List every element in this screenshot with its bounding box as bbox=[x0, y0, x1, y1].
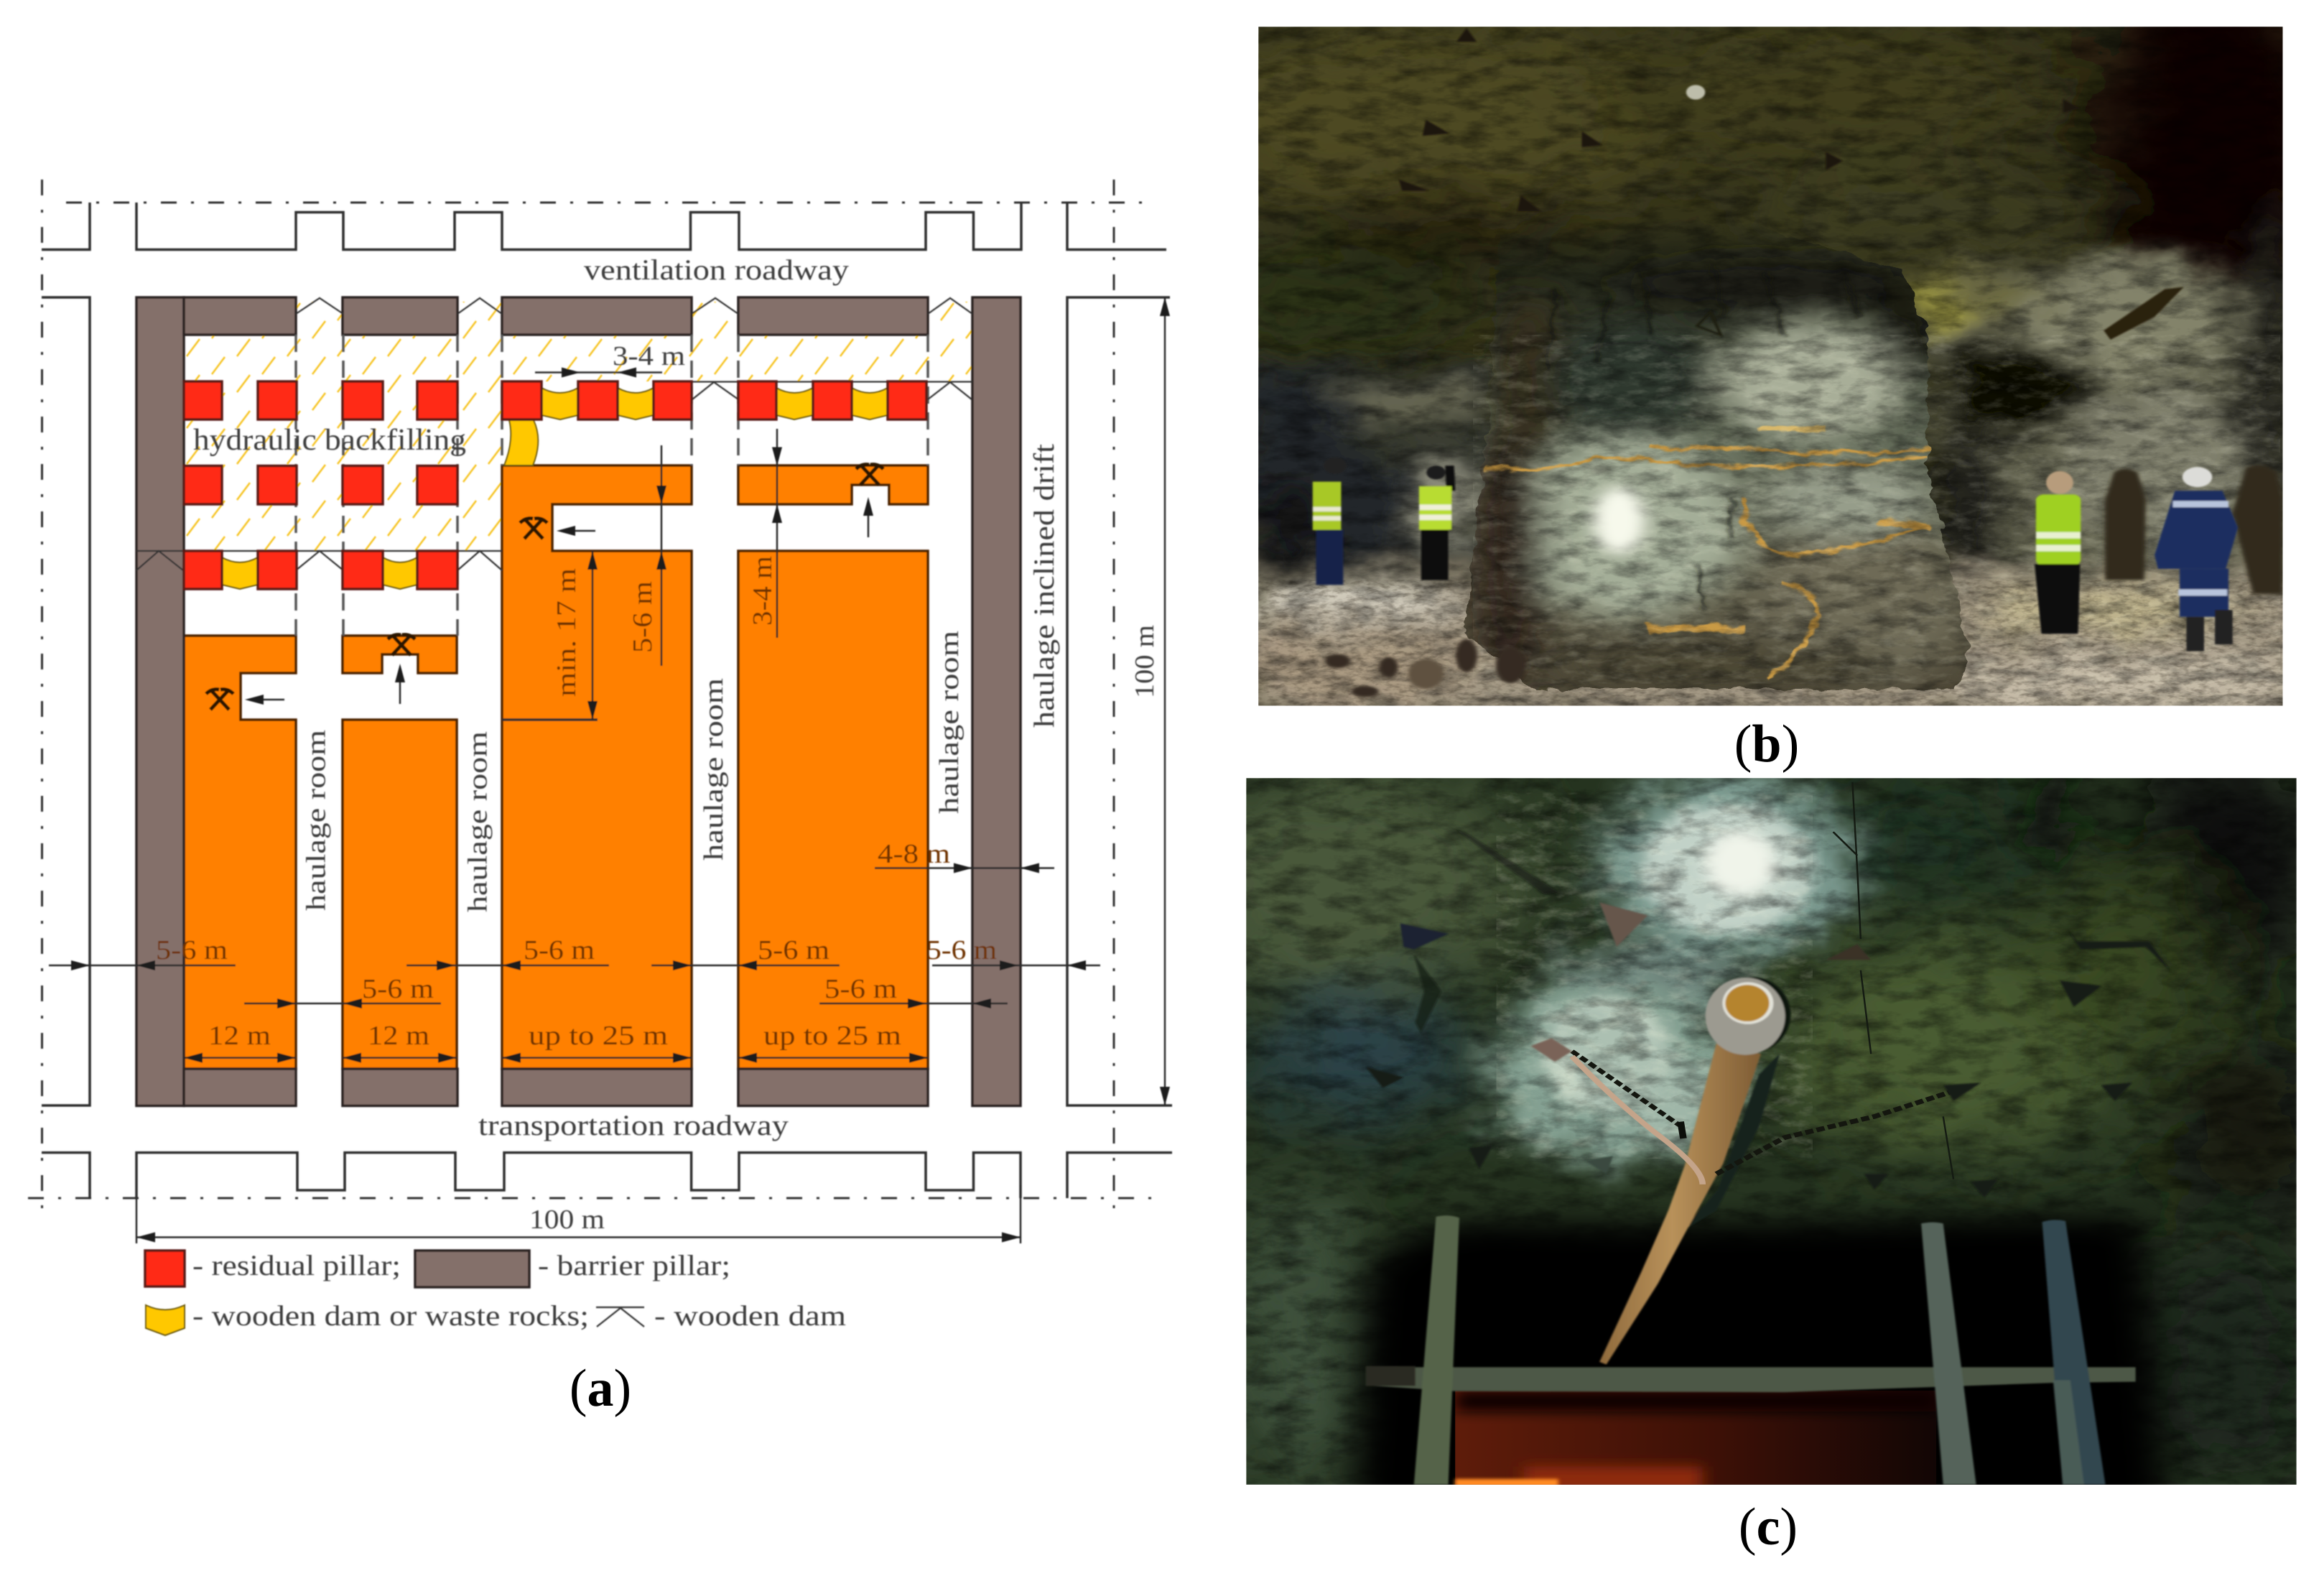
pipe bbox=[1599, 977, 1790, 1365]
room dashed edges bbox=[296, 335, 928, 636]
lamp spot on pillar bbox=[1594, 488, 1645, 554]
rock crumple highlights bbox=[1497, 793, 1813, 1159]
legend swatch: residual pillar bbox=[145, 1251, 185, 1286]
panel c: photo of backfilling pipe bbox=[1173, 741, 2321, 1518]
worker 3 bbox=[2035, 471, 2081, 634]
caption (a): (a) bbox=[570, 1359, 631, 1418]
label: 100 m width: 100 m bbox=[529, 1205, 605, 1235]
legend bbox=[145, 1249, 846, 1335]
labels: width dimensions: 12 m bbox=[368, 1021, 429, 1051]
legend text: wooden dam: - wooden dam bbox=[654, 1299, 846, 1332]
caption (c): (c) bbox=[1739, 1498, 1798, 1557]
labels: width dimensions: 5-6 m bbox=[758, 935, 829, 965]
caption (b): (b) bbox=[1734, 715, 1799, 774]
legend text: wooden dam or waste rocks: - wooden dam or waste rocks; bbox=[192, 1299, 589, 1332]
labels: rotated room names: 100 m bbox=[1130, 625, 1160, 698]
labels: rotated room names: haulage inclined drift bbox=[1028, 444, 1060, 728]
labels: rotated dimensions on orange: min. 17 m bbox=[552, 568, 582, 697]
residual pillars bbox=[184, 381, 926, 589]
solid massif outlines bbox=[42, 203, 1172, 1198]
dark cavity below roof bbox=[1352, 1215, 2170, 1518]
timber ladder frame bbox=[1366, 1215, 2136, 1485]
chains and rope bbox=[1572, 782, 1963, 1184]
dimension lines and arrows bbox=[49, 297, 1170, 1243]
legend text: barrier pillar: - barrier pillar; bbox=[538, 1249, 730, 1281]
worker shadows on wall bbox=[2105, 465, 2283, 594]
worker 1 bbox=[1313, 458, 1347, 585]
wooden dam chevrons and lines bbox=[136, 298, 972, 570]
labels: rotated dimensions on orange bbox=[552, 556, 778, 697]
legend text: residual pillar: - residual pillar; bbox=[192, 1249, 401, 1281]
labels: width dimensions: 5-6 m bbox=[156, 935, 228, 965]
worker 2 bbox=[1419, 465, 1451, 580]
heading: ventilation roadway: ventilation roadway bbox=[584, 254, 849, 286]
legend swatch: wooden dam or waste rocks bbox=[146, 1305, 185, 1335]
labels: width dimensions: 4-8 m bbox=[878, 839, 950, 869]
labels: width dimensions: 5-6 m bbox=[524, 935, 595, 965]
labels: rotated room names: haulage room bbox=[463, 731, 493, 912]
scattered rock pile bbox=[1326, 639, 1525, 697]
labels: width dimensions: 5-6 m bbox=[362, 974, 434, 1004]
labels: rotated room names bbox=[302, 444, 1160, 912]
hydraulic backfilling hatched area bbox=[184, 302, 972, 551]
labels: rotated dimensions on orange: 5-6 m bbox=[628, 581, 658, 653]
worker 4 bbox=[2155, 467, 2238, 651]
icons: crossed hammers at working faces bbox=[206, 465, 883, 710]
roof bolt plates and cracks bbox=[1366, 830, 2170, 1197]
heading: transportation roadway: transportation roadway bbox=[478, 1109, 789, 1141]
labels: width dimensions bbox=[156, 839, 997, 1051]
orange working panels bbox=[184, 465, 928, 1069]
rock light texture bbox=[1473, 335, 2280, 683]
labels: rotated dimensions on orange: 3-4 m bbox=[748, 556, 778, 626]
labels: rotated room names: haulage room bbox=[699, 678, 729, 861]
labels: rotated room names: haulage room bbox=[302, 730, 332, 911]
rock texture bbox=[1258, 27, 2283, 705]
wooden dams bbox=[222, 388, 888, 589]
labels: width dimensions: up to 25 m bbox=[529, 1021, 668, 1051]
cavern walls, roof and floor bbox=[1258, 27, 2282, 705]
sand texture bbox=[1258, 580, 2283, 705]
labels: width dimensions: up to 25 m bbox=[763, 1021, 901, 1051]
rock texture bbox=[1246, 778, 2297, 1485]
brightest lamp centre bbox=[1705, 831, 1776, 896]
mine roof and lamp light bbox=[1173, 741, 2321, 1493]
legend swatch: wooden dam chevron bbox=[596, 1307, 644, 1327]
rock pillar bbox=[1465, 216, 1969, 692]
red lit doorway bbox=[1455, 1391, 1936, 1493]
roof anchors and wall marks bbox=[1399, 28, 2184, 340]
labels: width dimensions: 12 m bbox=[208, 1021, 271, 1051]
label: 3-4 m horizontal: 3-4 m bbox=[613, 341, 685, 371]
dash-dot boundary lines bbox=[28, 180, 1162, 1215]
panel a: mine layout diagram bbox=[28, 180, 1172, 1335]
barrier pillars bbox=[136, 297, 1021, 1106]
face advance arrows bbox=[245, 497, 873, 705]
labels: width dimensions: 5-6 m bbox=[824, 974, 897, 1004]
panel b: photo of residual pillar with workers bbox=[1258, 27, 2282, 705]
lamp hot spots bbox=[1538, 803, 1813, 1159]
labels: width dimensions: 5-6 m bbox=[926, 935, 997, 965]
legend swatch: barrier pillar bbox=[415, 1251, 529, 1287]
label: hydraulic backfilling: hydraulic backfilling bbox=[193, 424, 466, 457]
labels: rotated room names: haulage room bbox=[934, 631, 965, 814]
